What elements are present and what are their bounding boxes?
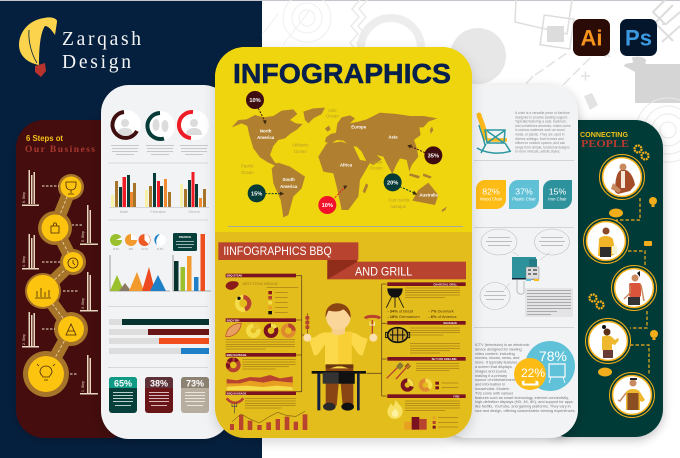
legs [326,365,353,406]
map labels: Australia [419,192,439,197]
card: iron chair: 15% [549,186,566,196]
tv description text: device designed for viewing [475,347,522,351]
bbq infographic: BBQ SAUSAGE [227,391,247,395]
section headers [226,274,466,398]
finance callout: FINANCE [179,235,191,239]
horizontal progress bars [109,319,209,354]
triangle chart [110,255,170,291]
icon: Adobe Illustrator badge [573,19,610,56]
charcoal grill section: - 7% Denmark [428,308,454,313]
person 5 [618,378,645,410]
donut charts [111,110,209,141]
bbq infographic: FIRE [453,394,460,398]
map callouts: 35% [428,153,439,159]
pie charts: 80% [129,249,133,251]
step chain [23,174,88,397]
map callouts: 10% [249,98,261,104]
sausage section with area chart [227,359,296,390]
sausage section with bars [227,398,307,430]
tv description text: source of entertainment [475,378,516,382]
pie charts: 31.1% [141,249,148,251]
tv stat circles: 22% [521,366,545,380]
heading: PEOPLE [581,138,629,150]
step labels: 2. Step [22,334,26,345]
speech bubbles [480,229,570,310]
map labels: Europe [351,125,367,130]
map labels: America [257,135,275,140]
panel: left white charts [101,85,231,439]
background geometric shapes [262,0,680,162]
chair description text: offices to outdoor spaces, and can [515,141,565,145]
chair description text: diverse settings, from homes and [515,137,564,141]
world map: Ocean [326,114,339,119]
bbq infographic [218,242,466,430]
world map: Artic [328,108,337,113]
logo text: Design [62,52,131,73]
shashlik section [386,328,460,353]
icon: feather quill [19,17,57,77]
finance callout [173,233,197,251]
bbq infographic: SHASHLIK [443,321,457,325]
heading: 6 Steps ot [26,134,63,143]
bar charts: male females others: Females [150,209,166,214]
world map: Ocean [294,149,307,154]
panel: 6 steps of our business [16,120,136,438]
tv description text: video content, including [475,352,515,356]
icon: gears [590,146,648,308]
bbq infographic: CHARCOAL GRILL [433,282,458,286]
heading [580,130,629,150]
card: plastic chair: Plastic Chair [512,196,536,202]
tv description text: TVs come with various [475,391,513,395]
tv description text: making it a primary [475,374,507,378]
card: plastic chair: 37% [515,186,533,196]
world map: Cum sociis [388,197,410,202]
tv description text: movies, shows, news, and [475,356,519,360]
continents [232,108,447,217]
world map: Ocean [370,165,383,170]
chair description text: range from simple, functional designs [515,145,570,149]
icon: control unit diagram [504,252,550,294]
tv description text: more. It typically features [475,361,517,365]
chair description text: Typically featuring a seat, backrest, [515,120,567,124]
chair description text: and sometimes armrests, chairs come [515,124,571,128]
map labels [257,125,439,197]
heading: CONNECTING [580,130,628,139]
donut captions [111,145,208,155]
person 2 [598,228,617,257]
world map: Indian [370,159,383,164]
map labels: Africa [340,163,353,168]
card 73%: 73% [186,378,204,388]
chair description text: in various materials such as wood, [515,128,565,132]
chair description text: to more intricate, artistic styles. [515,150,560,154]
charcoal grill section: - 34% of Brazil [387,308,413,313]
map callouts: 10% [322,203,333,209]
tv description text: like Netflix, YouTube, and gaming platforms. They vary in [475,405,571,409]
card: wood chair [476,180,506,209]
icon: Adobe Illustrator badge: Ai [580,26,602,50]
panel: central yellow infographics [215,47,472,438]
grill table [330,366,349,368]
world map [232,91,447,217]
tv description text: ICTV (television) is an electronic [475,343,530,347]
icon: Adobe Photoshop badge: Ps [625,26,652,50]
column chart [173,234,211,291]
charcoal grill section: - 6% of America [428,314,457,319]
bar charts: male females others: Others [188,209,200,214]
dashed connectors [616,198,649,375]
step labels: 1. Step [81,381,85,392]
bar charts: male females others: Male [120,209,129,214]
tv description text: a screen that displays [475,365,512,369]
panel backgrounds [215,47,472,438]
heading [25,134,95,155]
tv stat circles: 78% [539,348,567,364]
chair description text: designed to provide seating support. [515,115,568,119]
connector lines [296,276,387,396]
charcoal grill section [386,288,460,319]
card: iron chair: Iron Chair [548,196,567,202]
chair stat cards [476,180,572,209]
tv description text: images and sound, [475,369,507,373]
grilling tools section [387,362,459,390]
step labels: 6. Step [22,192,26,203]
map callouts [246,91,442,214]
fire section [387,399,460,430]
bbq infographic: BBQ FISH [227,318,239,322]
heading: Our Business [25,145,95,155]
banners: IINFOGRAPHICS BBQ [223,244,332,258]
bbq infographic: BBQ STEAK [227,274,242,278]
panel: green connecting people [540,120,663,437]
step labels: 3. Step [81,298,85,309]
fish section [226,323,295,349]
person 4 [602,325,619,358]
person at grill [303,303,380,411]
icon: rocking chair [477,115,511,153]
map labels: South [283,177,295,182]
shirt and arms [309,332,368,365]
map callouts: 20% [387,180,398,186]
map labels: Asia [388,135,398,140]
logo text: Zarqash [62,29,141,50]
tv description text: high-definition displays (HD, 4K, 8K), and support for apps [475,400,573,404]
world map: Pacific [241,163,255,168]
banners [218,242,466,279]
tv description text: and information in [475,383,505,387]
tv description text: features such as smart technology, internet connectivity, [475,396,569,400]
card: plastic chair [509,180,539,209]
step labels: 5. Step [81,231,85,242]
chair description text: metal, or plastic. They are used in [515,132,565,136]
bbq infographic: BBQ SAUSAGE [227,353,247,357]
chair description text [515,111,571,154]
tv description text: households. Modern [475,387,509,391]
map callouts: 15% [251,191,262,197]
steak section: BEST STEAK MEDIUM [243,282,278,286]
pie charts: 81.3% [157,249,163,251]
title: INFOGRAPHICS [233,58,451,89]
bbq infographic: SET FOR GRILLING [432,357,457,361]
percentage cards [109,377,209,413]
chair description text: A chair is a versatile piece of furniture [515,111,570,115]
world map: natoque [391,204,407,209]
card 38%: 38% [150,378,168,388]
card: wood chair: Wood Chair [480,196,503,202]
person 1 [611,164,635,194]
logo: Zarqash Design [19,17,141,77]
logo text [62,29,141,73]
world map: Athlantic [292,143,309,148]
card: iron chair [543,180,572,209]
pie charts: 13.3% [113,249,119,251]
grey note box [525,288,573,317]
map labels: North [260,128,272,133]
skewer and sausage fork [306,313,308,335]
person 3 [624,271,644,305]
tv description text [475,343,576,413]
charcoal grill section: - 18% Germanium [387,314,420,319]
icon: Adobe Photoshop badge [620,19,657,56]
world map: Ocean [241,170,254,175]
step labels: 4. Step [22,256,26,267]
head [332,325,345,335]
steak section [226,281,298,314]
card: wood chair: 82% [482,186,500,196]
map labels: America [280,184,298,189]
icons: speech bubbles and lamps [598,197,658,376]
banners: AND GRILL [355,264,413,278]
tv stat circles [514,341,575,391]
step labels [22,170,98,394]
tv description text: size and design, offering customizable viewing experiences. [475,409,576,413]
people portraits [584,154,656,418]
pie charts [110,234,166,251]
bar charts: male females others [109,172,209,214]
card 65%: 65% [114,378,132,388]
panel: right white chair and tv [440,85,578,438]
